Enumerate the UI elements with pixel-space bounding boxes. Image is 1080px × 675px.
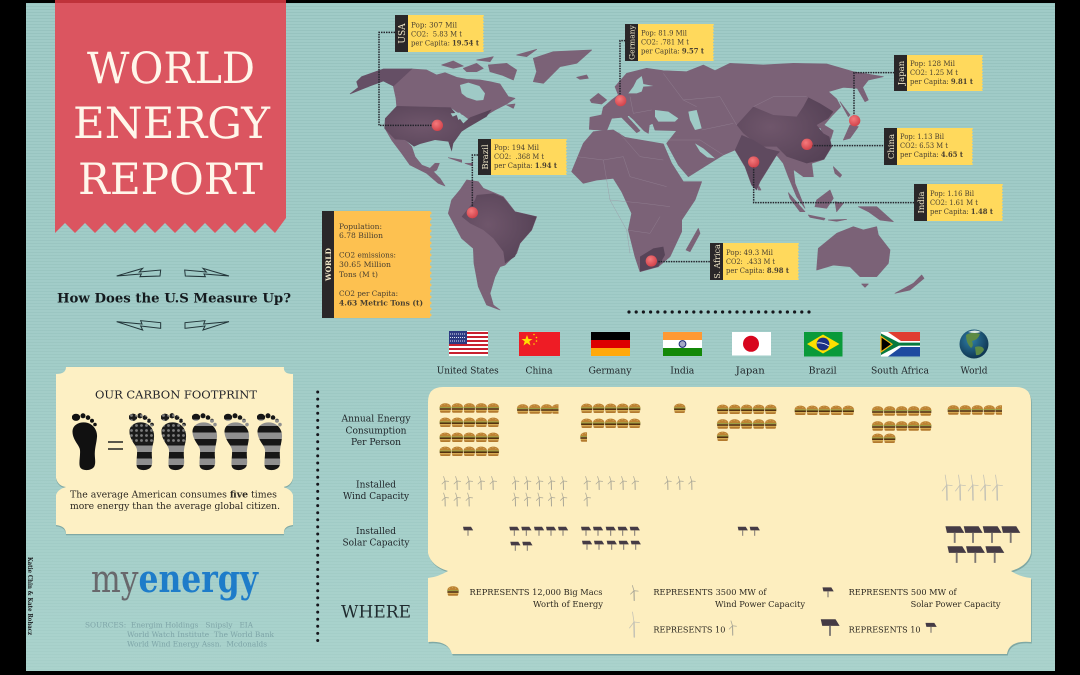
- americas, africa land: [385, 49, 702, 310]
- country names: China: [526, 366, 553, 376]
- sources: World Watch Institute The World Bank: [127, 630, 274, 639]
- callout: Japan: [894, 55, 982, 91]
- callout: Brazil: per Capita: 1.94 t: [494, 161, 558, 170]
- legend: Worth of Energy: [533, 600, 603, 610]
- subheading with lightning arrows: [57, 268, 291, 330]
- callout: USA: USA: [398, 23, 408, 44]
- country names: India: [670, 366, 695, 376]
- callout: World: 30.65 Million: [339, 260, 391, 269]
- flag: United States: [449, 331, 488, 356]
- india highlight: [735, 135, 780, 190]
- country names: Brazil: [809, 366, 837, 376]
- row labels: Solar Capacity: [342, 538, 410, 549]
- callout: India: India: [917, 191, 927, 214]
- sources: [85, 620, 274, 648]
- country names: World: [960, 366, 988, 376]
- title ribbon: WORLD: [87, 44, 255, 94]
- callout: World: [322, 211, 430, 318]
- callout: China: per Capita: 4.65 t: [900, 150, 964, 159]
- row labels: Installed: [356, 526, 396, 537]
- burger chart: energy per person: [440, 403, 1007, 456]
- dotted divider horizontal: [629, 310, 811, 314]
- callout: Japan: Pop: 128 Mil: [910, 60, 956, 68]
- callout: USA: CO2: 5.83 M t: [411, 30, 462, 38]
- footprint caption: more energy than the average global citizen.: [70, 501, 280, 512]
- eurasia land: [589, 63, 883, 208]
- legend: big turbine: [630, 612, 640, 637]
- callout: South Africa: per Capita: 8.98 t: [726, 266, 790, 275]
- callout: China: China: [887, 134, 897, 159]
- footprint caption: [70, 490, 280, 512]
- legend: REPRESENTS 10: [653, 626, 725, 636]
- row labels: Installed: [356, 480, 396, 490]
- legend: burger: [447, 586, 459, 596]
- seas: [628, 73, 715, 158]
- china highlight: [737, 97, 833, 163]
- callout: South Africa: [710, 243, 798, 280]
- country names: Japan: [735, 366, 765, 376]
- callout: World: Tons (M t): [339, 270, 378, 279]
- legend: big solar: [821, 619, 840, 636]
- flag: Brazil: [804, 332, 842, 356]
- title ribbon: REPORT: [78, 155, 263, 205]
- callout: Japan: per Capita: 9.81 t: [910, 77, 974, 86]
- title ribbon: ENERGY: [73, 99, 271, 149]
- callout: China: CO2: 6.53 M t: [900, 142, 948, 150]
- callout: USA: [395, 15, 483, 52]
- country borders: [577, 73, 807, 253]
- callout: Japan: Japan: [897, 60, 907, 86]
- callout: Brazil: CO2: .368 M t: [494, 153, 544, 161]
- country names: Germany: [588, 366, 632, 376]
- callout: World: CO2 emissions:: [339, 250, 396, 260]
- row labels: Wind Capacity: [343, 491, 410, 502]
- callout: South Africa: CO2: .433 M t: [726, 258, 775, 266]
- flag: China: [519, 332, 560, 356]
- callout: India: [914, 184, 1002, 221]
- sources: World Wind Energy Assn. Mcdonalds: [127, 640, 267, 648]
- callout: South Africa: Pop: 49.3 Mil: [726, 249, 774, 257]
- usa highlight: [384, 106, 492, 152]
- callout: USA: per Capita: 19.54 t: [411, 38, 480, 48]
- callout: World: 6.78 Billion: [339, 231, 383, 240]
- flag: India: [663, 332, 702, 356]
- legend: REPRESENTS 3500 MW of: [653, 588, 767, 598]
- dotted leader lines: [379, 32, 914, 262]
- callout: World: CO2 per Capita:: [339, 289, 398, 298]
- legend: REPRESENTS 12,000 Big Macs: [470, 588, 602, 598]
- flag: South Africa: [881, 332, 920, 356]
- icon: striped footprints: [129, 413, 283, 473]
- callout: World: 4.63 Metric Tons (t): [339, 298, 423, 308]
- credit: Katie Chin & Kate Rohacz: [26, 557, 34, 635]
- logo: myenergy: myenergy: [91, 556, 259, 601]
- callout: China: Pop: 1.13 Bil: [900, 133, 945, 141]
- footprint caption: The average American consumes five times: [70, 490, 277, 500]
- dotted divider vertical: [316, 392, 319, 644]
- alaska highlight: [350, 69, 412, 94]
- legend: REPRESENTS 10: [849, 626, 921, 636]
- callout: Germany: [625, 24, 713, 61]
- legend: Solar Power Capacity: [911, 600, 1001, 610]
- lightning arrows: [117, 268, 229, 330]
- panel: comparison and legend: [428, 387, 1032, 656]
- islands and australia: [758, 102, 924, 293]
- sources: SOURCES: Energim Holdings Snipsly EIA: [85, 620, 253, 630]
- hudson bay: [460, 83, 485, 101]
- callout: India: CO2: 1.61 M t: [930, 199, 978, 207]
- legend: turbine: [631, 586, 638, 600]
- icon: black footprint: [72, 413, 98, 473]
- solar chart: solar capacity: [463, 526, 1020, 563]
- panel: carbon footprint: OUR CARBON FOOTPRINT: [95, 388, 257, 402]
- callout: Brazil: [478, 139, 566, 175]
- where heading: WHERE: [341, 602, 411, 622]
- callout: India: per Capita: 1.48 t: [930, 207, 994, 216]
- turbine chart: wind capacity: [442, 475, 1002, 506]
- country names: South Africa: [871, 366, 930, 376]
- equals sign: [108, 442, 123, 449]
- callout: USA: Pop: 307 Mil: [411, 22, 458, 30]
- subheading with lightning arrows: How Does the U.S Measure Up?: [57, 292, 291, 306]
- callout: Germany: per Capita: 9.57 t: [641, 46, 705, 56]
- callout: Japan: CO2: 1.25 M t: [910, 69, 958, 77]
- flag: Japan: [732, 332, 771, 356]
- row labels: Consumption: [346, 425, 406, 436]
- legend: [447, 586, 1001, 637]
- row labels: Per Person: [351, 437, 401, 448]
- row labels: [341, 414, 411, 549]
- callout: World: Population:: [339, 222, 382, 231]
- callout: Germany: Germany: [628, 24, 636, 60]
- callout: India: Pop: 1.16 Bil: [930, 190, 975, 198]
- row labels: Annual Energy: [341, 414, 411, 424]
- callout: China: [884, 128, 972, 165]
- south africa highlight: [640, 247, 665, 272]
- callout: World: WORLD: [324, 248, 333, 282]
- world map: [350, 32, 924, 310]
- country names: United States: [437, 366, 499, 376]
- legend: Wind Power Capacity: [715, 600, 805, 610]
- flags row: [449, 330, 988, 358]
- callout: Brazil: Brazil: [481, 144, 491, 170]
- legend: solar: [822, 587, 834, 597]
- great lakes: [451, 113, 463, 120]
- title ribbon: [55, 0, 286, 233]
- legend: REPRESENTS 500 MW of: [849, 588, 957, 598]
- eurasia and oceania: [577, 63, 924, 293]
- country names: [437, 366, 988, 376]
- callout: Germany: CO2: .781 M t: [641, 38, 689, 46]
- callout: South Africa: S. Africa: [713, 244, 722, 279]
- flag: Germany: [591, 332, 630, 356]
- callout: Brazil: Pop: 194 Mil: [494, 144, 540, 152]
- callout: Germany: Pop: 81.9 Mil: [641, 30, 688, 38]
- icon: globe: [960, 330, 988, 358]
- brazil highlight: [462, 193, 537, 263]
- panel: carbon footprint: [56, 367, 293, 535]
- location pins: [432, 95, 860, 267]
